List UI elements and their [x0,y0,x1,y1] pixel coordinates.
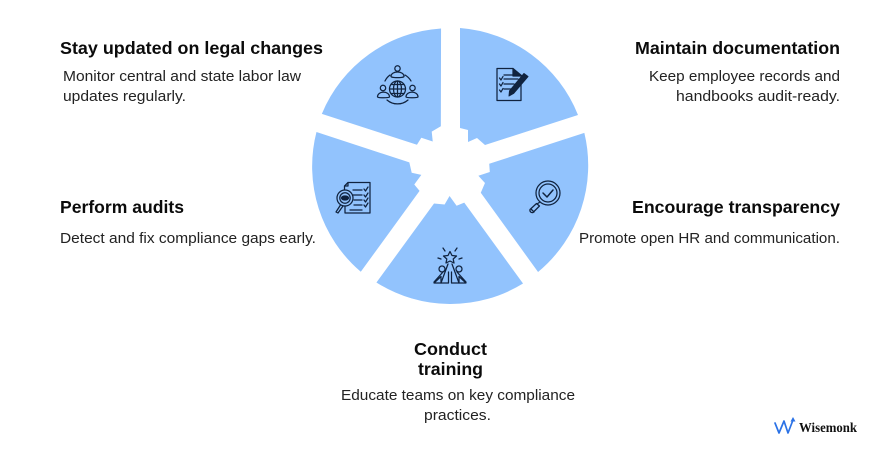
text: stay updated description: Monitor central and state labor law [63,69,302,85]
icon: magnifier with check [530,181,560,213]
icon: leaders with star [434,248,466,283]
wedge: maintain documentation [460,28,578,145]
heading: conduct training: Conduct [414,339,487,359]
text: encourage transparency description: Promote open HR and communication. [579,231,840,247]
wedge: encourage transparency [473,133,621,281]
icon: document audit magnifier [336,182,370,213]
wedge: stay updated [322,2,470,150]
heading: perform audits: Perform audits [60,197,184,217]
wedge: perform audits [265,108,430,272]
text: conduct training description: Educate teams on key compliance [341,388,575,404]
icon: document with pen [497,68,528,100]
text: perform audits description: Detect and fix compliance gaps early. [60,231,316,247]
heading: conduct training: training [418,359,483,379]
heading: stay updated: Stay updated on legal changes [60,38,323,58]
text: maintain documentation description: Keep employee records and [649,69,840,85]
panel: pie wedges [265,2,621,353]
logo: wisemonk [775,417,857,435]
heading: encourage transparency: Encourage transparency [632,197,840,217]
wedge: conduct training [359,189,523,353]
logo: wisemonk: Wisemonk [799,420,857,435]
heading: maintain documentation: Maintain documentation [635,38,840,58]
text: stay updated description: updates regularly. [63,89,186,105]
text: conduct training description: practices. [424,408,491,424]
icon: people around globe [378,66,418,104]
text: maintain documentation description: handbooks audit-ready. [676,89,840,105]
